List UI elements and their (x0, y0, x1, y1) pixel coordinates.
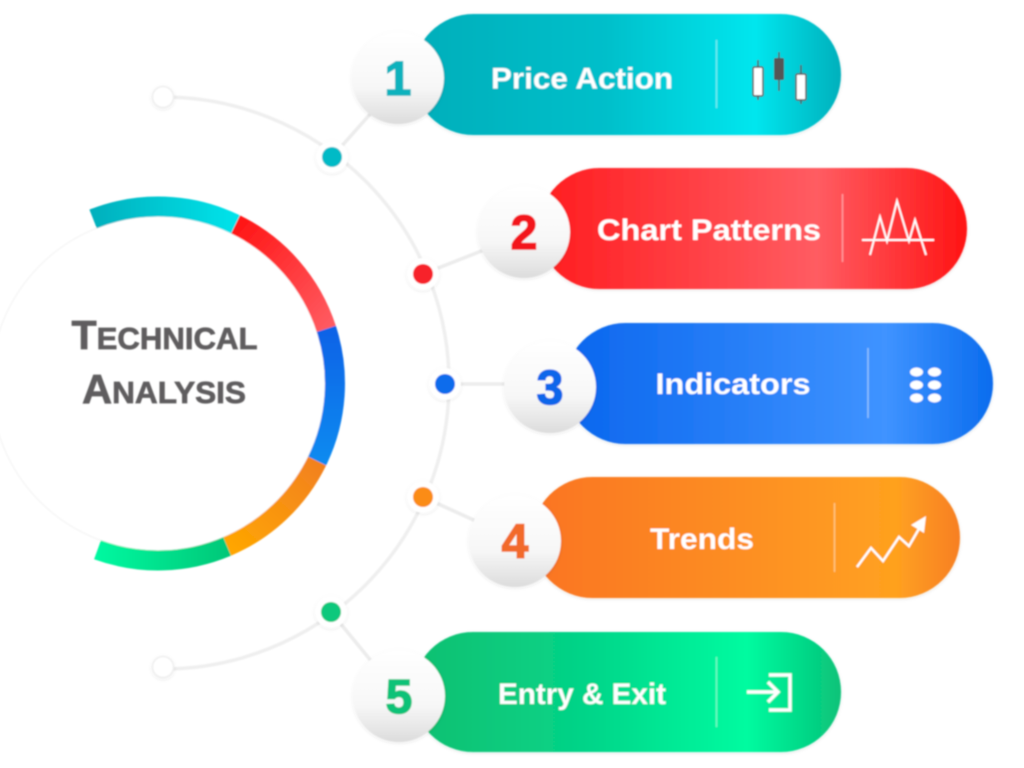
number disc 4: 4 (502, 516, 529, 569)
title (72, 312, 258, 412)
node 2 (407, 258, 439, 290)
number disc 4 (469, 495, 561, 587)
number disc 3 (504, 341, 596, 433)
pill 3: indicators (504, 323, 993, 444)
ring segment: cyan (93, 207, 236, 224)
title: TECHNICAL (72, 312, 258, 358)
number disc 3: 3 (537, 362, 563, 415)
icon: chart peaks (862, 201, 934, 255)
pill 2: chart patterns (478, 168, 967, 289)
bottom end node (152, 656, 174, 678)
node 5 (315, 596, 347, 628)
label: Indicators (656, 368, 810, 401)
central ring (0, 207, 335, 560)
ring segment: blue (317, 329, 335, 461)
number disc 1 (352, 32, 444, 124)
node 4 (407, 481, 439, 513)
ring segment: green (98, 546, 227, 560)
pill 5: entry and exit (353, 632, 841, 752)
ring segment: red (236, 224, 326, 329)
number disc 2 (478, 186, 570, 278)
number disc 5 (353, 650, 445, 742)
label: Chart Patterns (597, 214, 821, 247)
label: Trends (650, 523, 754, 556)
pill 4: trends (469, 477, 960, 598)
ring segment: orange (227, 461, 317, 546)
node 3 (429, 368, 461, 400)
label: Price Action (491, 62, 673, 96)
label: Entry & Exit (498, 678, 666, 711)
number disc 5: 5 (386, 671, 412, 724)
number disc 2: 2 (511, 207, 537, 260)
node 1 (316, 141, 348, 173)
icon: candlesticks (753, 52, 806, 104)
pill 1: price action (352, 14, 841, 135)
icon: enter arrow (747, 675, 790, 710)
title: ANALYSIS (82, 366, 246, 412)
connector arc (163, 97, 510, 669)
icon: six dots (910, 368, 941, 402)
icon: rising arrow (857, 516, 926, 567)
number disc 1: 1 (385, 53, 411, 106)
top end node (152, 86, 174, 108)
